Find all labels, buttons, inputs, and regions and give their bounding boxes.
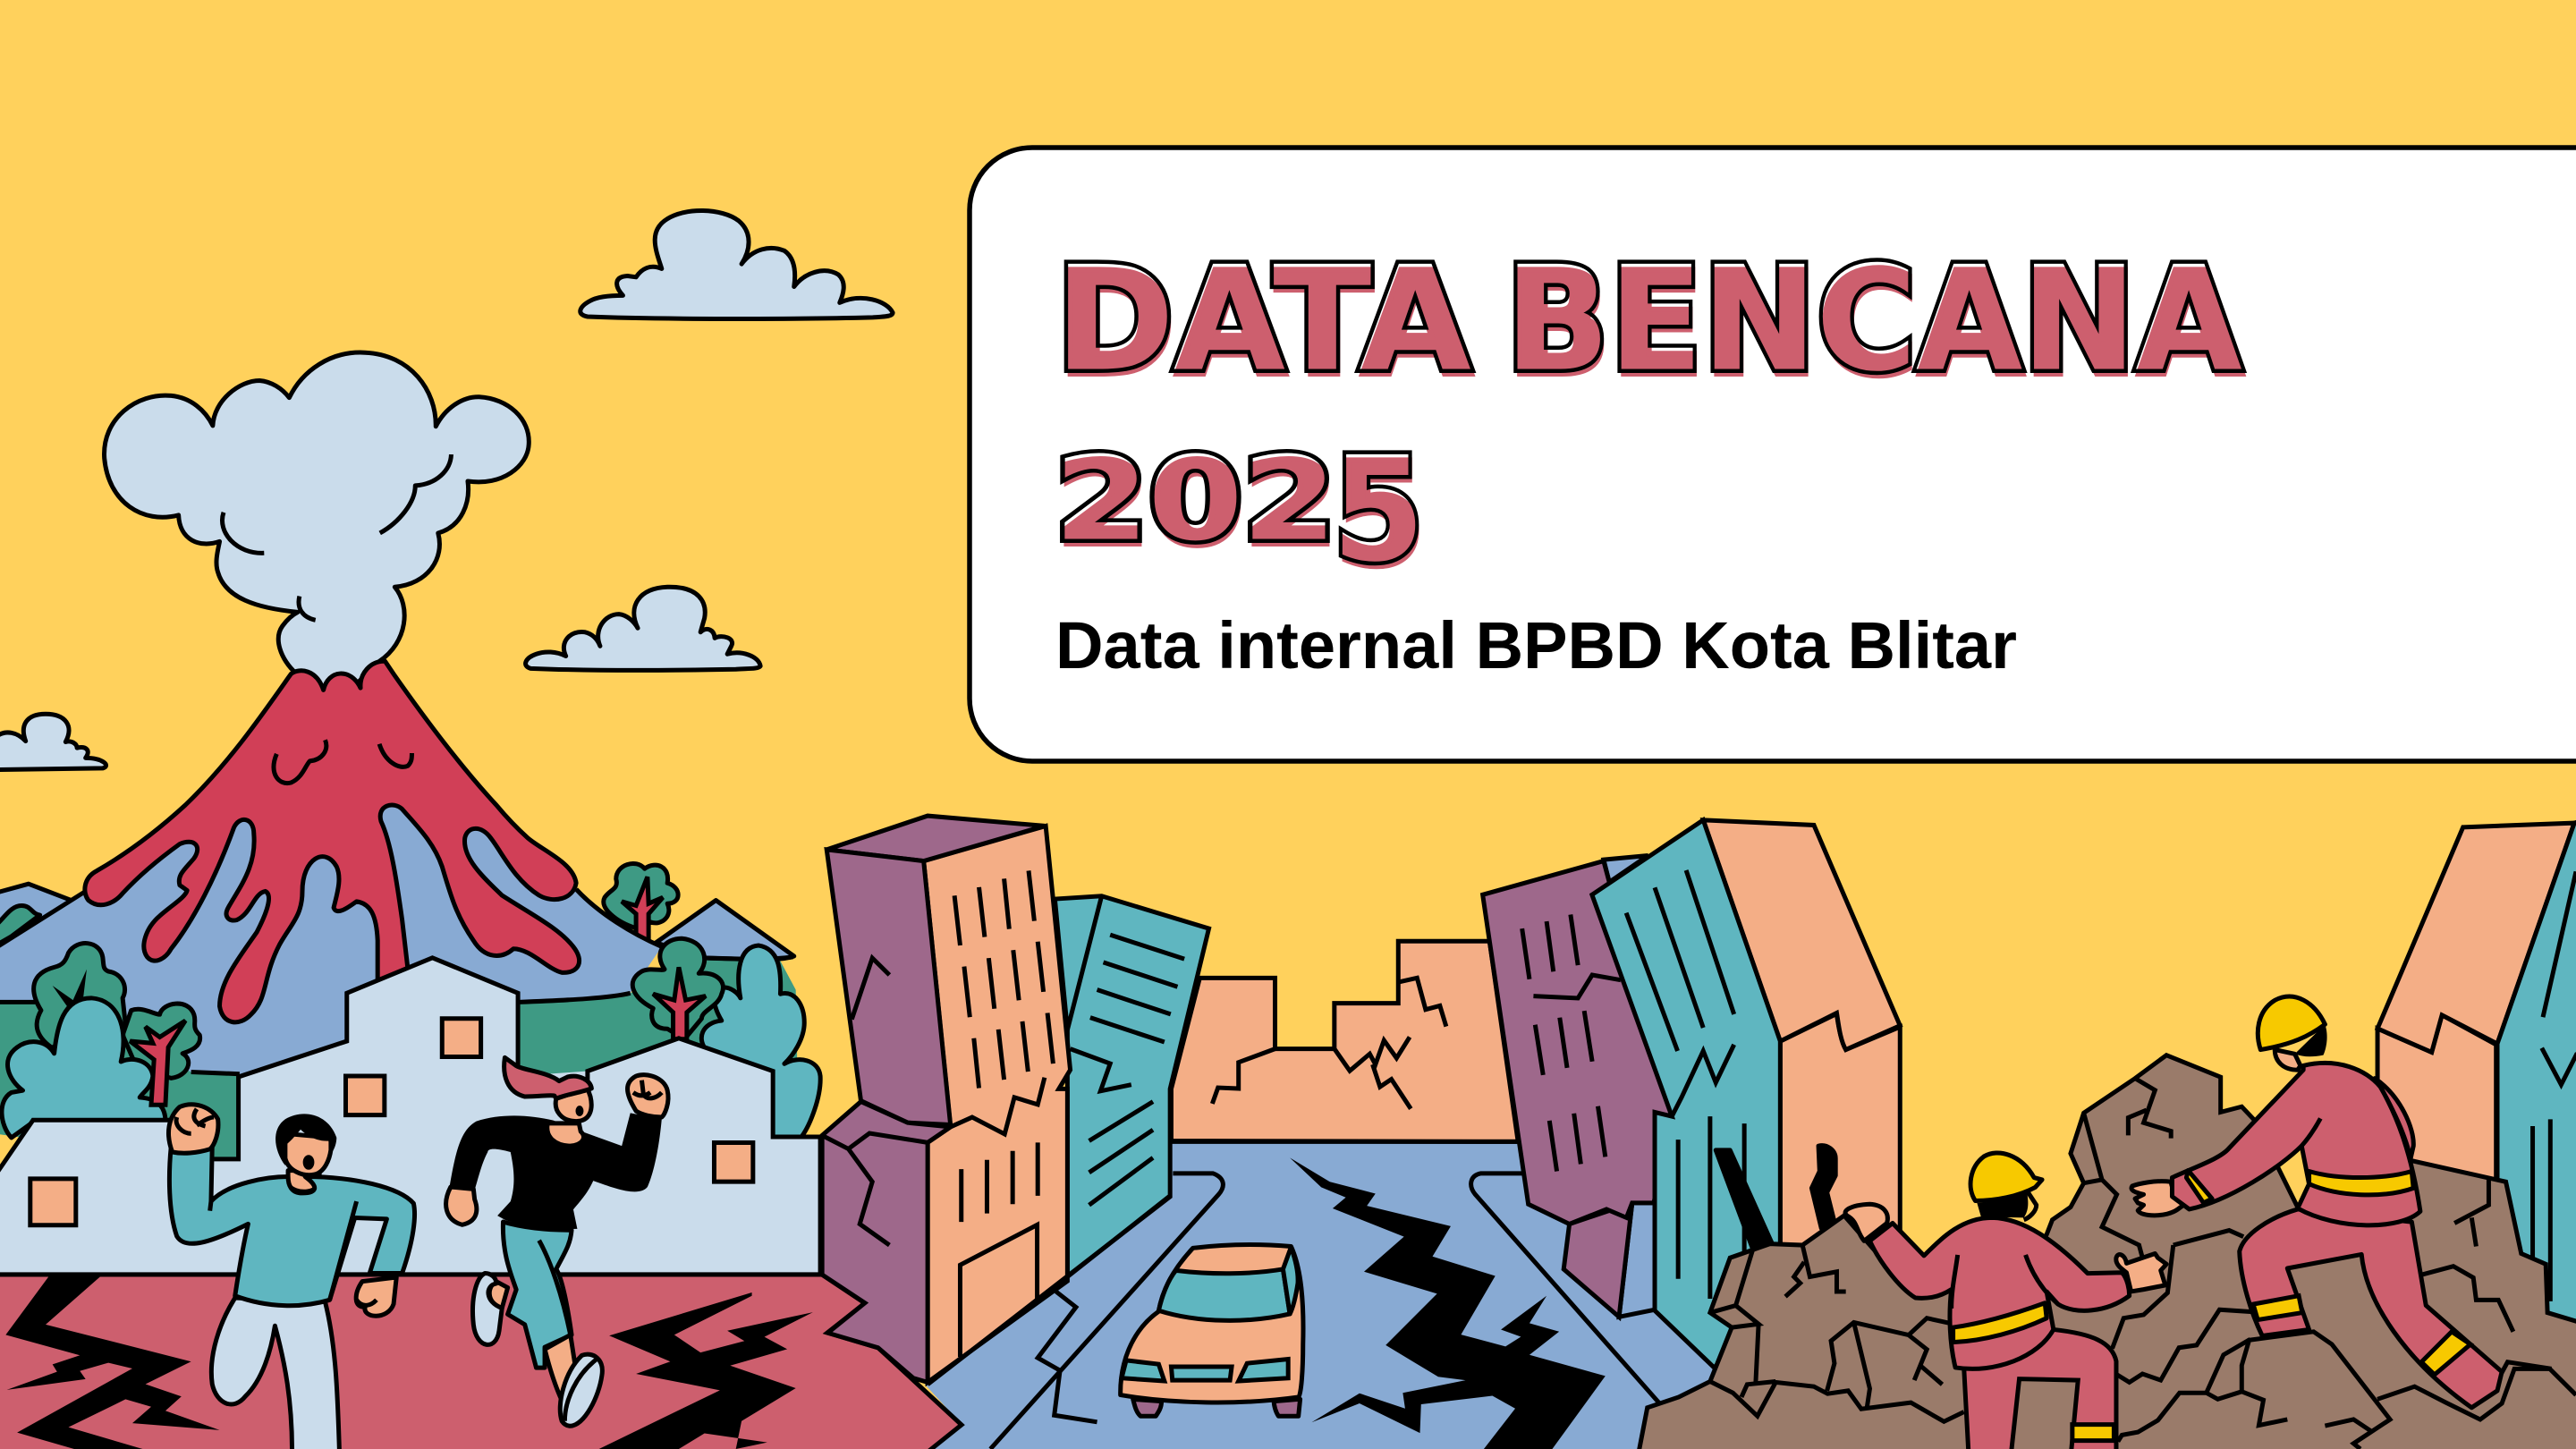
- tree: left big: [34, 944, 127, 1047]
- rubble pile: [1639, 1055, 2576, 1449]
- teal building left: [1055, 896, 1209, 1276]
- small tree left: [0, 905, 40, 945]
- car: [1121, 1245, 1303, 1416]
- volcano body: [0, 805, 662, 1078]
- cracks and running people: [5, 1057, 813, 1449]
- houses: [0, 958, 820, 1275]
- tree: right: [632, 938, 723, 1039]
- ground crack left: [5, 1275, 220, 1449]
- road edge: [1171, 1140, 1518, 1144]
- peach tower centre: [1703, 820, 1900, 1251]
- card panel: [970, 148, 2576, 761]
- volcano smoke: [105, 352, 529, 698]
- volcano outlines: [0, 889, 792, 1074]
- title: DATA BENCANA: DATA: [1057, 241, 1472, 408]
- title: DATA BENCANA: BENCANA: [1507, 241, 2243, 408]
- clouds and volcano smoke: [0, 211, 893, 770]
- right peach and teal towers: [2377, 817, 2576, 1386]
- back peach buildings: [1171, 941, 1518, 1141]
- rescue scene with right buildings: [1592, 817, 2576, 1449]
- lava flow: [85, 661, 580, 1022]
- cloud: middle: [526, 587, 760, 670]
- title: 2025: [1060, 449, 1419, 569]
- tree trunk: small left: [130, 1021, 185, 1105]
- title: 2025: 202: [1056, 438, 1338, 572]
- subtitle: Data internal BPBD Kota Blitar: [1055, 608, 2017, 682]
- ground: [0, 1275, 962, 1449]
- title card: [970, 148, 2576, 761]
- cloud: top: [580, 211, 893, 318]
- road: [913, 1141, 1775, 1449]
- rescuer left: [1845, 1153, 2166, 1449]
- man running: [168, 1105, 415, 1449]
- lava drip lines: [274, 740, 411, 784]
- bent steel bars: [1716, 1146, 1835, 1250]
- cracked city and road: [822, 816, 1672, 1449]
- woman running: [446, 1057, 668, 1426]
- tower: peach face: [924, 826, 1071, 1382]
- green fields: [0, 958, 799, 1159]
- smoke inner lines: [222, 454, 451, 620]
- purple leaning tower right: [1483, 855, 1672, 1317]
- road crack: [1290, 1157, 1606, 1449]
- tree: behind volcano: [604, 863, 678, 943]
- road kerbs and cracks: [928, 1174, 1659, 1449]
- small mountain left: [0, 884, 72, 949]
- tree: small left: [123, 1004, 200, 1078]
- teal tower centre: [1592, 820, 1780, 1368]
- title: DATA BENCANA: [1064, 258, 2247, 379]
- ground crack right: [599, 1292, 813, 1449]
- volcano landscape with trees and houses: [0, 661, 820, 1275]
- tower: purple side: [822, 816, 1045, 1382]
- cloud: left: [0, 714, 106, 770]
- small mountain right: [656, 901, 794, 960]
- title: 2025: 5: [1335, 431, 1426, 598]
- rescuer right: [2131, 996, 2502, 1408]
- bush left: [2, 998, 165, 1138]
- bush right: [701, 945, 820, 1137]
